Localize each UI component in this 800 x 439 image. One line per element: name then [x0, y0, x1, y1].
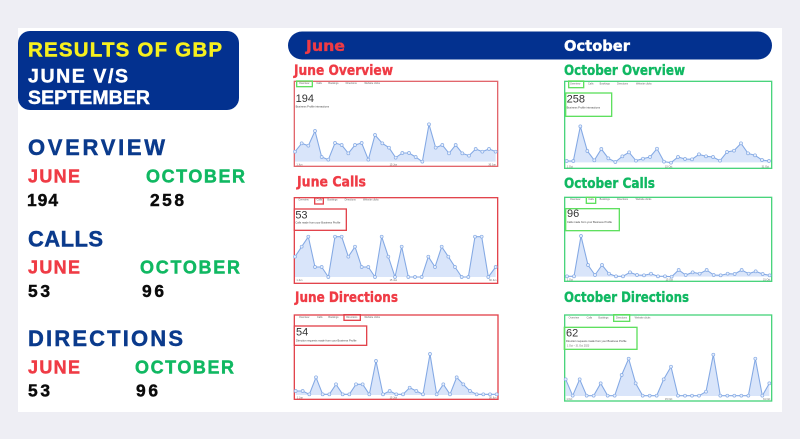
summary: calls [28, 226, 240, 301]
chart: june overview: Overview [299, 82, 310, 85]
chart: october overview: Bookings [600, 83, 611, 86]
chart: june directions: Overview [299, 316, 310, 319]
heading: calls: CALLS [28, 226, 103, 252]
heading: june calls: June Calls [296, 175, 366, 191]
chart: october directions: Direction requests made from your Business Profile [566, 339, 627, 343]
heading: october overview: October Overview [564, 63, 685, 79]
chart: june calls: 1 Jun [296, 279, 303, 282]
chart: june directions: Direction requests made from your Business Profile [296, 338, 357, 342]
chart: october calls: Directions [617, 198, 629, 201]
october label: OCTOBER [140, 257, 240, 277]
heading: overview: OVERVIEW [28, 135, 165, 160]
chart: october overview: 31 Oct [762, 165, 769, 168]
october label: OCTOBER [146, 167, 245, 187]
chart: june directions: Directions [346, 316, 358, 319]
summary: directions [28, 326, 234, 401]
october value: 96 [142, 281, 164, 301]
october value: 96 [136, 381, 158, 401]
chart: june overview: 194 [296, 93, 314, 105]
chart: june calls: 53 [295, 209, 308, 221]
chart: october calls: Website clicks [636, 198, 652, 201]
june value: 53 [28, 281, 50, 301]
chart: october directions: 15 Oct [665, 398, 673, 401]
june value: 194 [27, 190, 58, 210]
chart: june directions: Calls [317, 316, 323, 319]
chart: june calls [294, 198, 498, 283]
chart: june overview [294, 81, 498, 167]
chart: october overview: 15 Oct [665, 165, 673, 168]
june label: JUNE [28, 357, 80, 377]
chart: october directions: Directions [616, 316, 628, 319]
chart: june directions: Bookings [328, 316, 339, 319]
chart: october directions: Overview [569, 316, 579, 319]
chart: june calls: 30 Jun [489, 279, 497, 282]
october value: 258 [150, 190, 184, 210]
chart: october overview [565, 81, 772, 168]
chart: june calls: Directions [345, 198, 356, 201]
title panel [18, 31, 239, 110]
chart: june directions: 15 Jun [390, 397, 398, 400]
june value: 53 [28, 381, 50, 401]
heading: october calls: October Calls [564, 176, 655, 192]
chart: june calls: Calls made from your Business Profile [295, 221, 341, 225]
chart: june calls: Bookings [327, 198, 338, 201]
chart: october directions: Calls [587, 316, 593, 319]
chart: october overview: 1 Oct [567, 165, 573, 168]
chart: june overview: 1 Jun [296, 164, 303, 167]
heading: directions: DIRECTIONS [28, 326, 183, 351]
chart: june overview: Website clicks [364, 82, 381, 85]
chart: october directions: 1 Oct – 31 Oct 2023 [567, 345, 590, 348]
chart: october overview: Directions [617, 83, 629, 86]
chart: october directions: 1 Oct [566, 398, 573, 401]
chart: october calls: Bookings [600, 198, 611, 201]
subtitle line 2: SEPTEMBER [28, 87, 150, 109]
chart: june overview: Bookings [328, 82, 339, 85]
june label: JUNE [28, 167, 80, 187]
chart: october directions: Website clicks [635, 316, 651, 319]
header: october: October [564, 37, 630, 55]
chart: october overview: Website clicks [636, 83, 652, 86]
june label: JUNE [28, 257, 80, 277]
chart: june calls: Website clicks [363, 198, 379, 201]
chart: june overview: 15 Jun [390, 164, 398, 167]
chart: june calls: 15 Jun [390, 279, 398, 282]
chart: october calls: 15 Oct [666, 278, 673, 281]
summary: overview [27, 135, 245, 210]
chart: june overview: Business Profile interactions [296, 105, 330, 109]
chart: october calls: 96 [567, 208, 579, 220]
chart: june directions: Website clicks [364, 316, 381, 319]
chart: october calls: Calls [588, 198, 595, 201]
chart: october overview: Calls [588, 83, 594, 86]
chart: october overview: Business Profile interactions [567, 105, 601, 109]
chart: june directions [294, 315, 498, 400]
chart: october directions: 31 Oct [763, 398, 771, 401]
chart: june directions: 54 [296, 327, 308, 339]
heading: june directions: June Directions [294, 290, 398, 306]
chart: october calls: Overview [570, 198, 581, 201]
chart: october calls: Calls made from your Business Profile [567, 220, 613, 224]
chart: october overview: 258 [567, 94, 585, 106]
chart: june overview: Calls [316, 82, 323, 85]
heading: june overview: June Overview [293, 63, 393, 79]
header bar [288, 32, 772, 60]
chart: june overview: 30 Jun [488, 164, 496, 167]
chart: june calls: Calls [317, 198, 323, 201]
chart: june overview: Directions [346, 82, 357, 85]
chart: june directions: 30 Jun [489, 397, 497, 400]
chart: october calls [565, 197, 772, 281]
chart: october calls: 1 Oct [567, 278, 573, 281]
subtitle line 1: JUNE V/S [28, 66, 128, 88]
chart: october calls: 31 Oct [763, 278, 771, 281]
chart: october directions: 62 [566, 327, 578, 339]
chart: june directions: 1 Jun [297, 397, 304, 400]
heading: october directions: October Directions [564, 290, 689, 306]
chart: october directions [564, 315, 772, 401]
chart: october overview: Overview [570, 83, 581, 86]
chart: june calls: Overview [298, 198, 309, 201]
october label: OCTOBER [135, 357, 234, 377]
title: results of GBP: RESULTS OF GBP [28, 39, 222, 62]
header: june: June [305, 37, 345, 55]
chart: october directions: Bookings [598, 316, 609, 319]
